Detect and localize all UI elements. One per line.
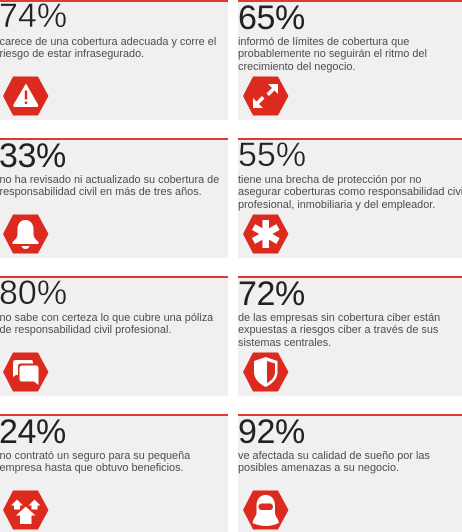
text: 65% description: probablemente no seguirán el ritmo del <box>238 48 427 60</box>
text: 55% description: profesional, inmobiliaria y del empleador. <box>238 199 435 211</box>
text: 92% description <box>238 450 430 474</box>
text: 65% description: crecimiento del negocio. <box>238 61 355 73</box>
text: 24% description <box>0 450 190 474</box>
panel: 72% <box>238 276 462 396</box>
icon: speech bubbles <box>3 352 48 392</box>
text: 24% description: empresa hasta que obtuvo beneficios. <box>0 462 184 474</box>
icon: three up arrows <box>3 490 48 530</box>
panel: 24% <box>0 414 228 532</box>
icon: balaclava <box>243 490 288 530</box>
text: 33% description <box>0 174 219 198</box>
icon: asterisk <box>243 214 288 254</box>
text: 72% description: expuestas a riesgos ciber a través de sus <box>238 324 438 336</box>
text: 92% description: ve afectada su calidad de sueño por las <box>238 450 430 462</box>
text: 55% description <box>238 174 462 211</box>
text: 55% description: asegurar coberturas como responsabilidad civil <box>238 186 462 198</box>
text: 33% description: responsabilidad civil en más de tres años. <box>0 186 202 198</box>
stat: 72%: 72% <box>238 274 305 312</box>
stat: 55%: 55% <box>238 136 306 174</box>
text: 80% description <box>0 312 214 336</box>
text: 80% description: de responsabilidad civil profesional. <box>0 324 171 336</box>
panel: 33% <box>0 138 228 258</box>
icon: bell <box>3 214 48 254</box>
text: 74% description: carece de una cobertura adecuada y corre el <box>0 36 216 48</box>
text: 72% description <box>238 312 440 349</box>
panel: 74% <box>0 0 228 120</box>
icon: shield <box>243 352 288 392</box>
text: 55% description: tiene una brecha de protección por no <box>238 174 421 186</box>
stat: 92%: 92% <box>238 413 305 451</box>
text: 92% description: posibles amenazas a su negocio. <box>238 462 399 474</box>
stat: 33%: 33% <box>0 137 66 175</box>
text: 24% description: no contrató un seguro para su pequeña <box>0 450 190 462</box>
panel: 65% <box>238 0 462 120</box>
panel: 55% <box>238 138 462 258</box>
icon: expand arrows <box>243 76 288 116</box>
text: 72% description: sistemas centrales. <box>238 337 331 349</box>
text: 65% description: informó de límites de cobertura que <box>238 36 409 48</box>
stat: 65%: 65% <box>238 0 305 37</box>
text: 33% description: no ha revisado ni actualizado su cobertura de <box>0 174 219 186</box>
panel: 80% <box>0 276 228 396</box>
text: 74% description <box>0 36 216 60</box>
stat: 24%: 24% <box>0 413 66 451</box>
text: 80% description: no sabe con certeza lo que cubre una póliza <box>0 312 213 324</box>
icon: warning triangle <box>3 76 48 116</box>
stat: 80%: 80% <box>0 274 67 312</box>
text: 74% description: riesgo de estar infrasegurado. <box>0 48 144 60</box>
panel: 92% <box>238 414 462 532</box>
text: 65% description <box>238 36 427 73</box>
text: 72% description: de las empresas sin cobertura ciber están <box>238 312 440 324</box>
